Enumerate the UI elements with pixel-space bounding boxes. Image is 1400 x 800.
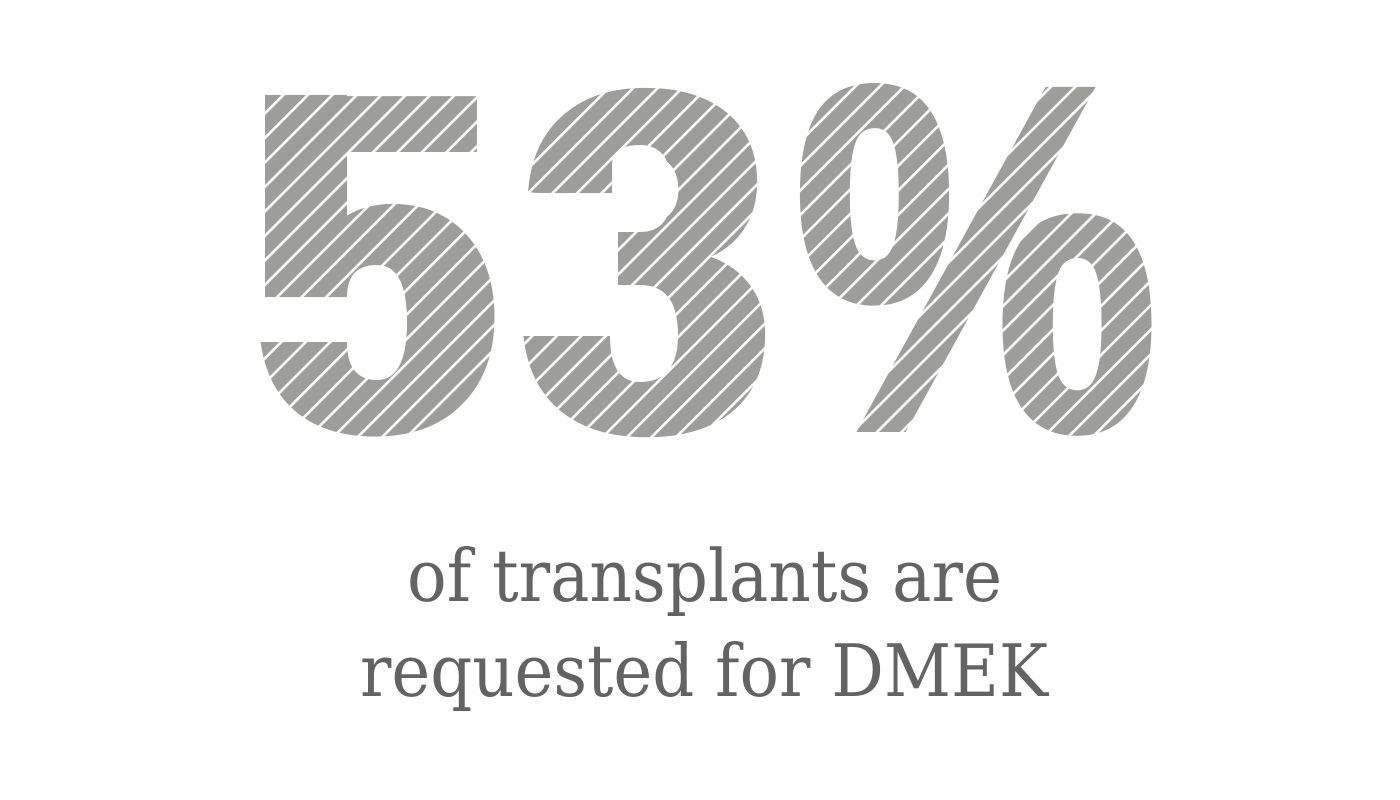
caption: of transplants are [407,534,1002,618]
caption: requested for DMEK [360,629,1049,713]
caption [360,534,1049,713]
headline statistic: 53%: 3 [521,0,774,525]
headline statistic: 53%: % [793,0,1159,532]
headline statistic: 53%: 5 [255,3,499,523]
headline statistic: 53% [240,0,1170,532]
